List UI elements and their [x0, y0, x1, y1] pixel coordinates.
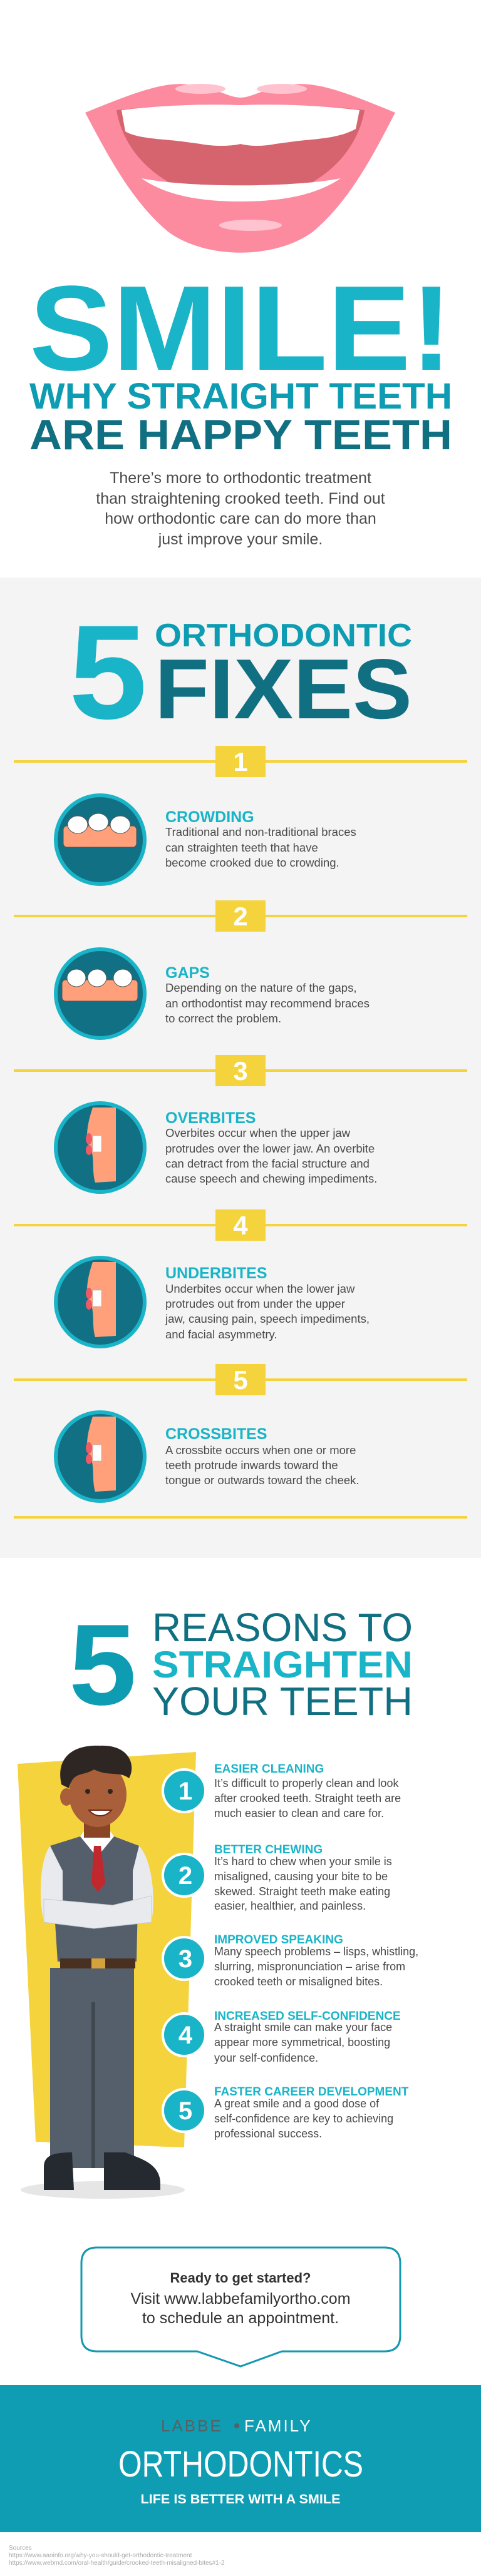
intro paragraph: just improve your smile.: [158, 531, 323, 548]
reason 3: improved speaking: [214, 1933, 418, 1988]
item: underbites: protrudes out from under the upper: [165, 1297, 345, 1310]
reason 5: faster career development: A great smile and a good dose of: [214, 2097, 380, 2110]
sources: https://www.aaoinfo.org/why-you-should-get-orthodontic-treatment: [9, 2552, 192, 2559]
reason 4: increased self-confidence: your self-confidence.: [214, 2052, 318, 2064]
sources: [9, 2545, 225, 2567]
tagline: LIFE IS BETTER WITH A SMILE: [140, 2492, 341, 2507]
reason 3: improved speaking: Many speech problems – lisps, whistling,: [214, 1945, 418, 1958]
item: overbites: protrudes over the lower jaw. An overbite: [165, 1142, 375, 1155]
item: crossbites: CROSSBITES: [165, 1425, 267, 1443]
heading: 5 orthodontic fixes: [69, 598, 412, 747]
reason 3: improved speaking: IMPROVED SPEAKING: [214, 1933, 343, 1947]
footer: logo band: [0, 2385, 481, 2532]
intro paragraph: how orthodontic care can do more than: [105, 510, 376, 527]
reason 2: better chewing: It’s hard to chew when your smile is: [214, 1855, 392, 1868]
reason 2: better chewing: skewed. Straight teeth make eating: [214, 1885, 390, 1898]
reason 1: easier cleaning: much easier to clean and care for.: [214, 1807, 384, 1820]
number circles: reasons: 2: [178, 1862, 192, 1890]
item: crossbites: [165, 1425, 359, 1487]
reason 5: faster career development: professional success.: [214, 2127, 322, 2140]
number badges: 5: [233, 1365, 248, 1395]
number badges: [215, 746, 266, 1395]
item: overbites: OVERBITES: [165, 1109, 256, 1127]
icon: crossbite profile: [56, 1412, 145, 1501]
item: crowding: [165, 808, 356, 869]
panel: 5 orthodontic fixes: [0, 578, 481, 1558]
item: gaps: GAPS: [165, 964, 210, 982]
item: overbites: Overbites occur when the upper jaw: [165, 1126, 351, 1139]
callout: ready to get started: Visit www.labbefamilyortho.com: [130, 2290, 351, 2308]
sources: https://www.webmd.com/oral-health/guide/crooked-teeth-misaligned-bites#1-2: [9, 2560, 225, 2567]
number badges: 1: [233, 747, 248, 776]
reason 5: faster career development: [214, 2085, 409, 2140]
number circles: reasons: 3: [178, 1945, 192, 1973]
item: crossbites: tongue or outwards toward the cheek.: [165, 1474, 359, 1487]
logo: orthodontics: ORTHODONTICS: [118, 2444, 363, 2485]
heading: 5 reasons to straighten your teeth: [69, 1600, 413, 1729]
reason 1: easier cleaning: EASIER CLEANING: [214, 1763, 324, 1776]
intro paragraph: than straightening crooked teeth. Find out: [96, 490, 385, 507]
item: crowding: become crooked due to crowding.: [165, 856, 339, 869]
item: crowding: Traditional and non-traditional braces: [165, 825, 356, 838]
number badges: 2: [233, 902, 248, 931]
heading: 5 orthodontic fixes: 5: [69, 598, 147, 747]
item: gaps: Depending on the nature of the gaps,: [165, 981, 357, 994]
icon: overbite profile: [56, 1103, 145, 1192]
reason 1: easier cleaning: after crooked teeth. Straight teeth are: [214, 1792, 401, 1805]
number circles: reasons: [163, 1769, 205, 2132]
heading: 5 orthodontic fixes: FIXES: [155, 641, 412, 736]
reason 4: increased self-confidence: appear more symmetrical, boosting: [214, 2036, 390, 2049]
reason 1: easier cleaning: [214, 1763, 401, 1820]
reason 5: faster career development: FASTER CAREER DEVELOPMENT: [214, 2085, 409, 2099]
number badges: 4: [233, 1211, 248, 1240]
item: crowding: can straighten teeth that have: [165, 841, 318, 854]
number badges: 3: [233, 1056, 248, 1086]
heading: 5 reasons to straighten your teeth: YOUR TEETH: [152, 1679, 413, 1724]
reason 2: better chewing: BETTER CHEWING: [214, 1843, 323, 1856]
item: gaps: to correct the problem.: [165, 1012, 281, 1025]
logo: labbe family: [161, 2416, 313, 2435]
subtitle: are happy teeth: ARE HAPPY TEETH: [29, 411, 452, 459]
intro paragraph: There’s more to orthodontic treatment: [110, 469, 371, 487]
callout: ready to get started: to schedule an appointment.: [142, 2309, 339, 2327]
heading: 5 reasons to straighten your teeth: 5: [69, 1600, 137, 1729]
item: gaps: [165, 964, 370, 1025]
item: crossbites: teeth protrude inwards toward the: [165, 1459, 338, 1472]
item: crossbites: A crossbite occurs when one or more: [165, 1443, 356, 1457]
reason 5: faster career development: self-confidence are key to achieving: [214, 2112, 393, 2125]
reason 4: increased self-confidence: A straight smile can make your face: [214, 2021, 392, 2034]
icon: underbite profile: [56, 1258, 145, 1347]
callout: ready to get started: [81, 2248, 400, 2366]
heading: 5 orthodontic fixes: ORTHODONTIC: [155, 618, 412, 654]
item: underbites: [165, 1265, 370, 1341]
subtitle: why straight teeth: WHY STRAIGHT TEETH: [29, 376, 452, 417]
reason 2: better chewing: easier, healthier, and painless.: [214, 1900, 366, 1912]
item: underbites: and facial asymmetry.: [165, 1328, 277, 1341]
reason 2: better chewing: misaligned, causing your bite to be: [214, 1870, 388, 1883]
illustration: smiling lips: [85, 84, 395, 253]
logo: labbe family: LABBE: [161, 2416, 223, 2435]
item: underbites: jaw, causing pain, speech impediments,: [165, 1312, 370, 1325]
illustration: yellow backdrop and man: [18, 1746, 196, 2199]
heading: 5 reasons to straighten your teeth: STRAIGHTEN: [152, 1644, 413, 1686]
reason 3: improved speaking: slurring, mispronunciation – arise from: [214, 1960, 405, 1973]
item: overbites: [165, 1109, 377, 1185]
reason 2: better chewing: [214, 1843, 392, 1912]
heading: 5 reasons to straighten your teeth: REASONS TO: [152, 1605, 413, 1650]
item: underbites: UNDERBITES: [165, 1265, 267, 1282]
item: gaps: an orthodontist may recommend braces: [165, 997, 370, 1010]
item: overbites: can detract from the facial structure and: [165, 1157, 370, 1170]
number circles: reasons: 1: [178, 1778, 192, 1805]
reason 1: easier cleaning: It’s difficult to properly clean and look: [214, 1777, 400, 1789]
logo: labbe family: FAMILY: [244, 2416, 313, 2435]
item: underbites: Underbites occur when the lower jaw: [165, 1282, 355, 1295]
item: overbites: cause speech and chewing impediments.: [165, 1172, 377, 1185]
sources: Sources: [9, 2545, 32, 2552]
title: SMILE!: SMILE!: [29, 260, 452, 395]
reason 3: improved speaking: crooked teeth or misaligned bites.: [214, 1975, 383, 1988]
reason 4: increased self-confidence: [214, 2010, 401, 2064]
intro paragraph: [96, 469, 385, 548]
number circles: reasons: 4: [178, 2022, 193, 2049]
reason 4: increased self-confidence: INCREASED SELF-CONFIDENCE: [214, 2010, 401, 2023]
number circles: reasons: 5: [178, 2097, 192, 2125]
icon: crowding teeth: [56, 795, 145, 884]
item: crowding: CROWDING: [165, 808, 254, 826]
callout: ready to get started: Ready to get started?: [170, 2270, 311, 2286]
icon: gaps teeth: [56, 949, 145, 1038]
